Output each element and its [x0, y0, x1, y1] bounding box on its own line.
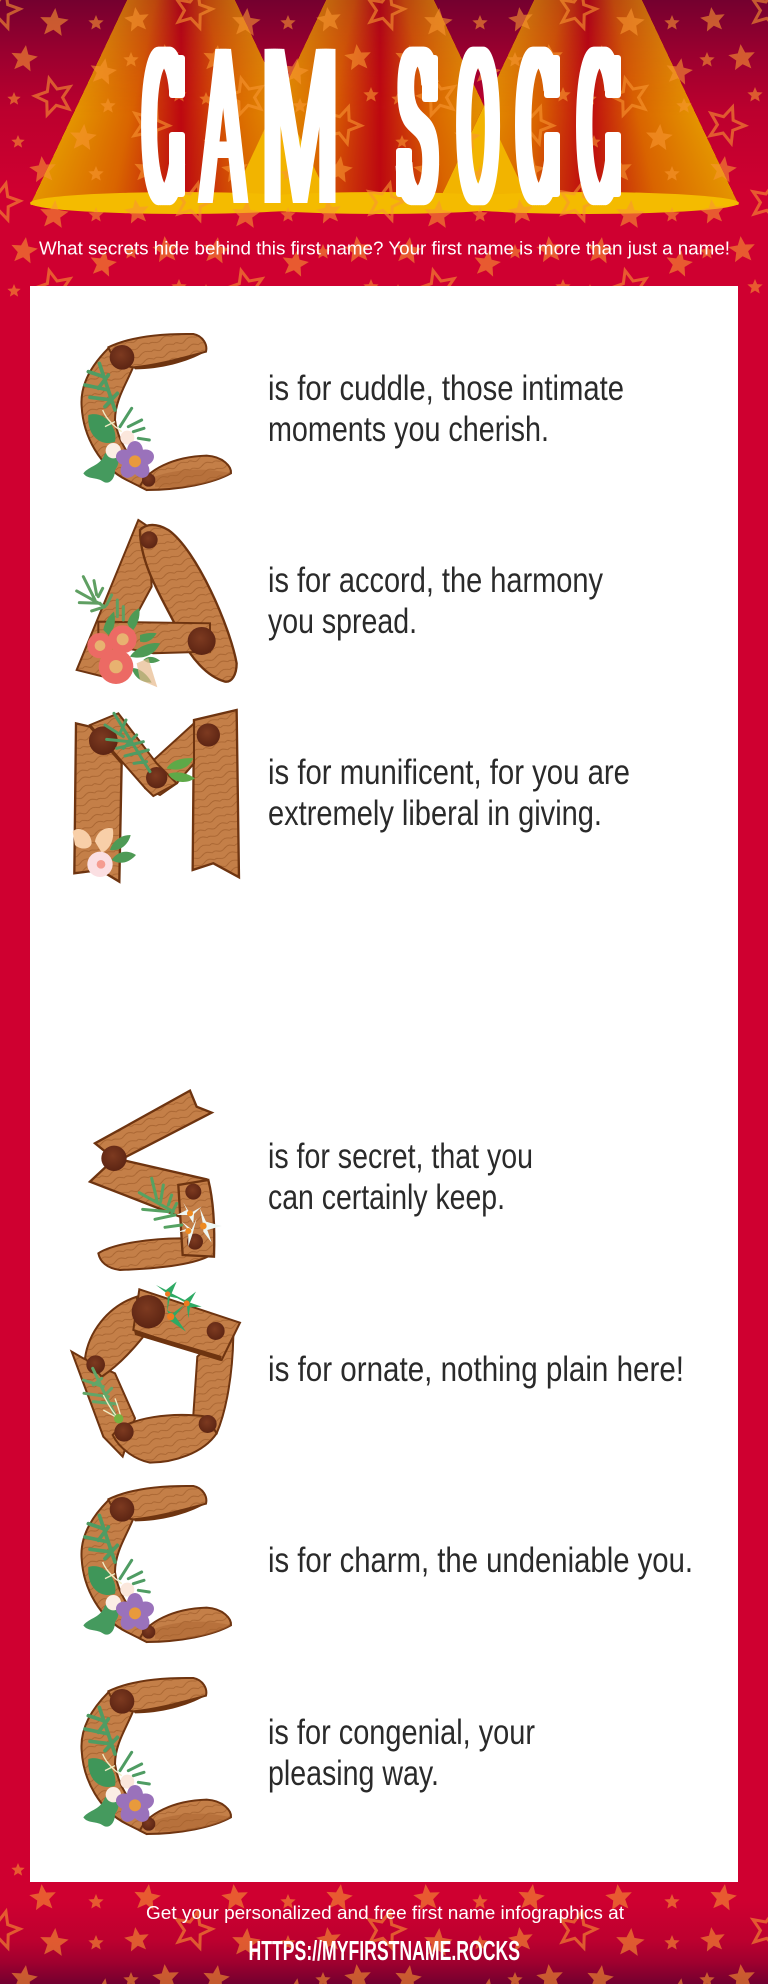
text: M meaning	[268, 753, 630, 833]
title: C	[144, 1, 182, 251]
text: S meaning: is for secret, that you	[268, 1137, 533, 1176]
text: C meaning: is for cuddle, those intimate	[268, 369, 624, 408]
text: C meaning: is for congenial, your	[268, 1713, 535, 1752]
text: S meaning	[268, 1137, 533, 1217]
icon: wooden letter C with flowers	[81, 1486, 231, 1642]
text: S meaning: can certainly keep.	[268, 1178, 505, 1217]
text: C meaning: moments you cherish.	[268, 410, 549, 449]
title: O	[459, 1, 497, 251]
title: M	[260, 1, 338, 251]
icon: wooden letter S with flowers	[90, 1091, 222, 1270]
text: C meaning	[268, 369, 624, 449]
spotlights: three cones	[30, 0, 739, 214]
text: M meaning: extremely liberal in giving.	[268, 794, 602, 833]
subtitle: What secrets hide behind this first name? Your first name is more than just a name!	[39, 238, 730, 258]
text: M meaning: is for munificent, for you are	[268, 753, 630, 792]
row: letter S (secret)	[90, 1091, 533, 1270]
text: C meaning: pleasing way.	[268, 1754, 439, 1793]
text: A meaning: is for accord, the harmony	[268, 561, 603, 600]
text: A meaning	[268, 561, 603, 641]
text: C meaning: is for charm, the undeniable you.	[268, 1541, 693, 1580]
title: S	[399, 1, 436, 251]
footer line: call to action: Get your personalized and free first name infographics at	[146, 1902, 624, 1923]
icon: wooden letter C with flowers	[81, 334, 231, 490]
text: O meaning: is for ornate, nothing plain here!	[268, 1350, 684, 1389]
title: A	[202, 1, 245, 251]
row: letter A (accord)	[77, 520, 603, 687]
icon: wooden letter C with flowers	[81, 1678, 231, 1834]
icon: wooden letter A with flowers	[77, 520, 237, 687]
title: C	[518, 1, 556, 251]
title: C	[579, 1, 617, 251]
icon: wooden letter O with flowers	[72, 1282, 240, 1463]
row: letter M (munificent)	[73, 710, 630, 882]
text: C meaning	[268, 1713, 535, 1793]
title	[141, 1, 621, 251]
row: letter C (cuddle)	[81, 334, 624, 490]
row: letter O (ornate)	[72, 1282, 684, 1463]
text: A meaning: you spread.	[268, 602, 417, 641]
icon: wooden letter M with flowers	[73, 710, 239, 882]
row: letter C (charm)	[81, 1486, 693, 1642]
row: letter C (congenial)	[81, 1678, 535, 1834]
footer line: website url: HTTPS://MYFIRSTNAME.ROCKS	[248, 1935, 520, 1966]
